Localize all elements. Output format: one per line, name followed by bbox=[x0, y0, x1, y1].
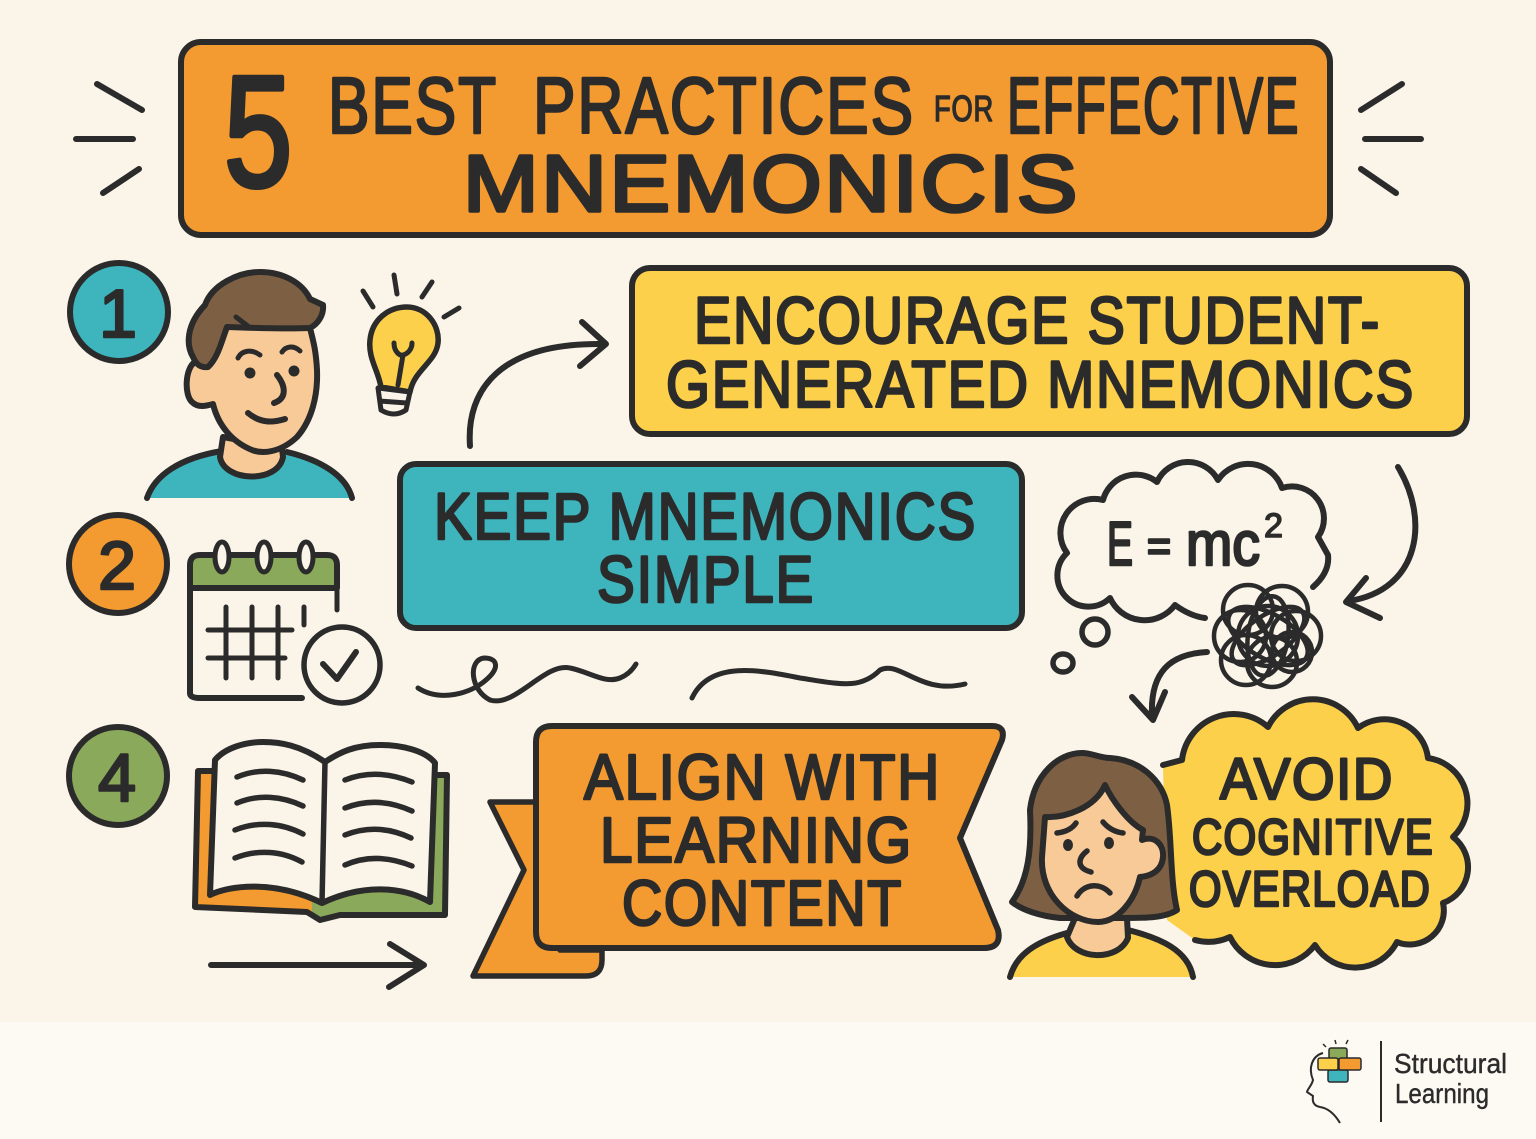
panel: encourage student-generated mnemonics bbox=[632, 268, 1467, 434]
speech cloud: avoid cognitive overload: OVERLOAD bbox=[1189, 861, 1431, 917]
speech cloud: avoid cognitive overload: COGNITIVE bbox=[1192, 809, 1434, 865]
ribbon: align with learning content bbox=[473, 726, 1003, 976]
ribbon: align with learning content: ALIGN WITH bbox=[584, 741, 941, 813]
title burst right bbox=[1361, 84, 1421, 193]
panel: keep mnemonics simple bbox=[400, 464, 1022, 628]
logo: Structural Learning: Structural bbox=[1394, 1048, 1507, 1079]
panel: keep mnemonics simple: KEEP MNEMONICS bbox=[434, 479, 977, 553]
title banner: 5 bbox=[224, 44, 296, 220]
arrow to student-generated bbox=[470, 322, 606, 446]
icon: overwhelmed girl bbox=[1010, 753, 1193, 977]
number badge 2: 2 bbox=[98, 528, 138, 604]
icon: calendar bbox=[190, 542, 380, 703]
arrow from scribble to overload bbox=[1132, 652, 1207, 720]
number badge 4: 4 bbox=[98, 740, 138, 816]
squiggle right bbox=[692, 668, 965, 698]
ribbon: align with learning content: CONTENT bbox=[622, 867, 903, 939]
icon: thought cloud with formula: = bbox=[1147, 522, 1171, 571]
icon: thought cloud with formula bbox=[1053, 462, 1328, 672]
arrow from encourage panel to scribble bbox=[1346, 467, 1415, 618]
ribbon: align with learning content: LEARNING bbox=[600, 804, 913, 876]
logo: Structural Learning: Learning bbox=[1395, 1078, 1489, 1109]
number badge 4 bbox=[69, 727, 167, 825]
number badge 1: 1 bbox=[99, 276, 139, 352]
panel: encourage student-generated mnemonics: ENCOURAGE STUDENT- bbox=[694, 283, 1381, 357]
title banner: FOR bbox=[934, 88, 994, 129]
icon: thought cloud with formula: mc bbox=[1186, 510, 1260, 579]
icon: thought cloud with formula: 2 bbox=[1264, 507, 1283, 545]
speech cloud: avoid cognitive overload bbox=[1163, 699, 1468, 968]
title burst left bbox=[76, 84, 142, 193]
title banner: PRACTICES bbox=[533, 61, 915, 150]
title banner: BEST bbox=[328, 61, 498, 150]
icon: thought cloud with formula: E bbox=[1107, 510, 1133, 579]
arrow under book bbox=[211, 944, 424, 987]
panel: encourage student-generated mnemonics: GENERATED MNEMONICS bbox=[666, 347, 1415, 421]
title banner: EFFECTIVE bbox=[1007, 61, 1300, 150]
icon: light bulb bbox=[363, 275, 459, 414]
icon: open book bbox=[195, 742, 447, 920]
logo: Structural Learning bbox=[1307, 1040, 1507, 1123]
icon: tangled scribble bbox=[1214, 585, 1321, 687]
speech cloud: avoid cognitive overload: AVOID bbox=[1220, 747, 1394, 812]
number badge 2 bbox=[69, 515, 167, 613]
number badge 1 bbox=[70, 263, 168, 361]
title banner bbox=[181, 42, 1330, 235]
title banner: MNEMONICIS bbox=[463, 139, 1080, 228]
icon: student bbox=[147, 272, 352, 498]
panel: keep mnemonics simple: SIMPLE bbox=[597, 542, 815, 616]
squiggle left bbox=[418, 658, 636, 701]
